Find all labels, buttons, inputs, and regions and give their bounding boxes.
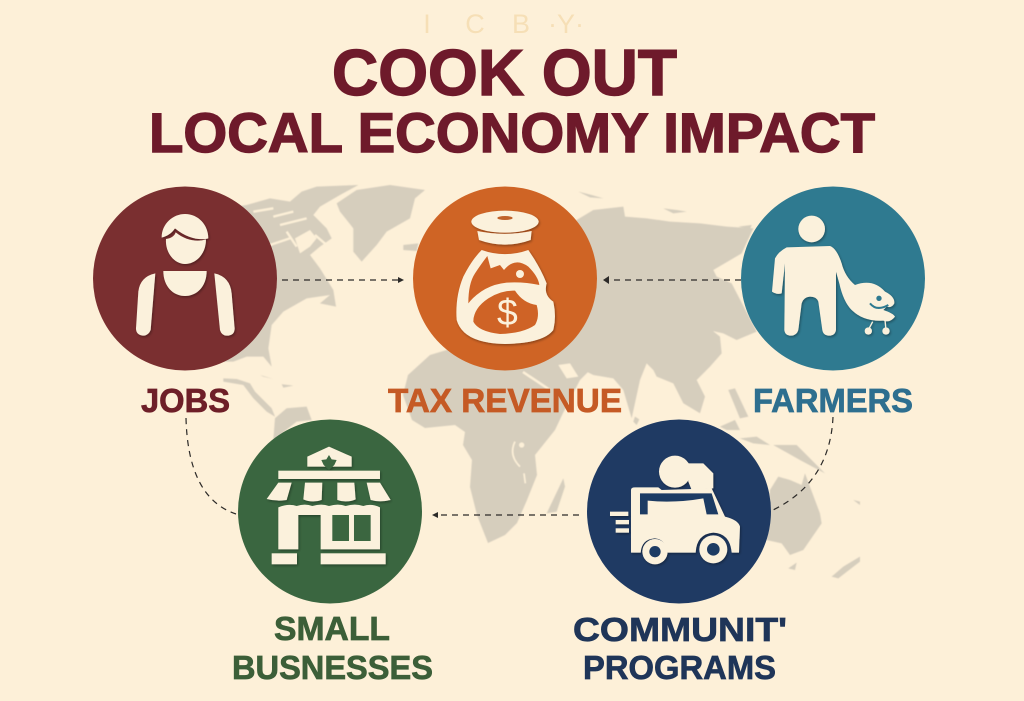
title: LOCAL ECONOMY IMPACT bbox=[149, 101, 875, 164]
title bbox=[149, 36, 875, 164]
arrow: jobs to small businesses bbox=[186, 418, 236, 514]
faint top lettering bbox=[423, 9, 584, 39]
label: small businesses bbox=[232, 610, 433, 686]
arrow: community programs to small businesses bbox=[432, 512, 579, 518]
panel: community programs bbox=[573, 420, 787, 686]
arrow: farmers to community programs bbox=[773, 417, 833, 510]
title: COOK OUT bbox=[332, 36, 677, 109]
faint top lettering: I bbox=[423, 9, 431, 39]
label: small businesses: SMALL bbox=[274, 610, 390, 647]
label: small businesses: BUSNESSES bbox=[232, 649, 433, 686]
icon: farmer with animal bbox=[772, 216, 895, 336]
icon: worker bbox=[136, 214, 235, 336]
world map background bbox=[223, 185, 860, 578]
label: tax revenue: TAX REVENUE bbox=[388, 382, 622, 419]
faint top lettering: B bbox=[512, 9, 530, 39]
icon: storefront bbox=[267, 447, 391, 564]
label: farmers: FARMERS bbox=[753, 382, 913, 419]
label: community programs bbox=[573, 611, 787, 686]
panel: tax revenue bbox=[388, 186, 622, 419]
faint top lettering: C bbox=[465, 9, 485, 39]
icon: money bag bbox=[456, 211, 555, 344]
arrow: jobs to tax revenue bbox=[282, 277, 404, 283]
label: community programs: PROGRAMS bbox=[583, 649, 776, 686]
label: jobs: JOBS bbox=[141, 382, 230, 419]
faint top lettering: ·Y· bbox=[548, 9, 584, 39]
icon: money bag: $ bbox=[497, 291, 518, 333]
label: community programs: COMMUNIT' bbox=[573, 611, 787, 648]
arrow: farmers to tax revenue bbox=[603, 276, 741, 284]
icon: food truck bbox=[610, 456, 740, 564]
panel: small businesses bbox=[232, 420, 433, 686]
panel: jobs bbox=[93, 186, 277, 419]
panel: farmers bbox=[741, 186, 925, 419]
